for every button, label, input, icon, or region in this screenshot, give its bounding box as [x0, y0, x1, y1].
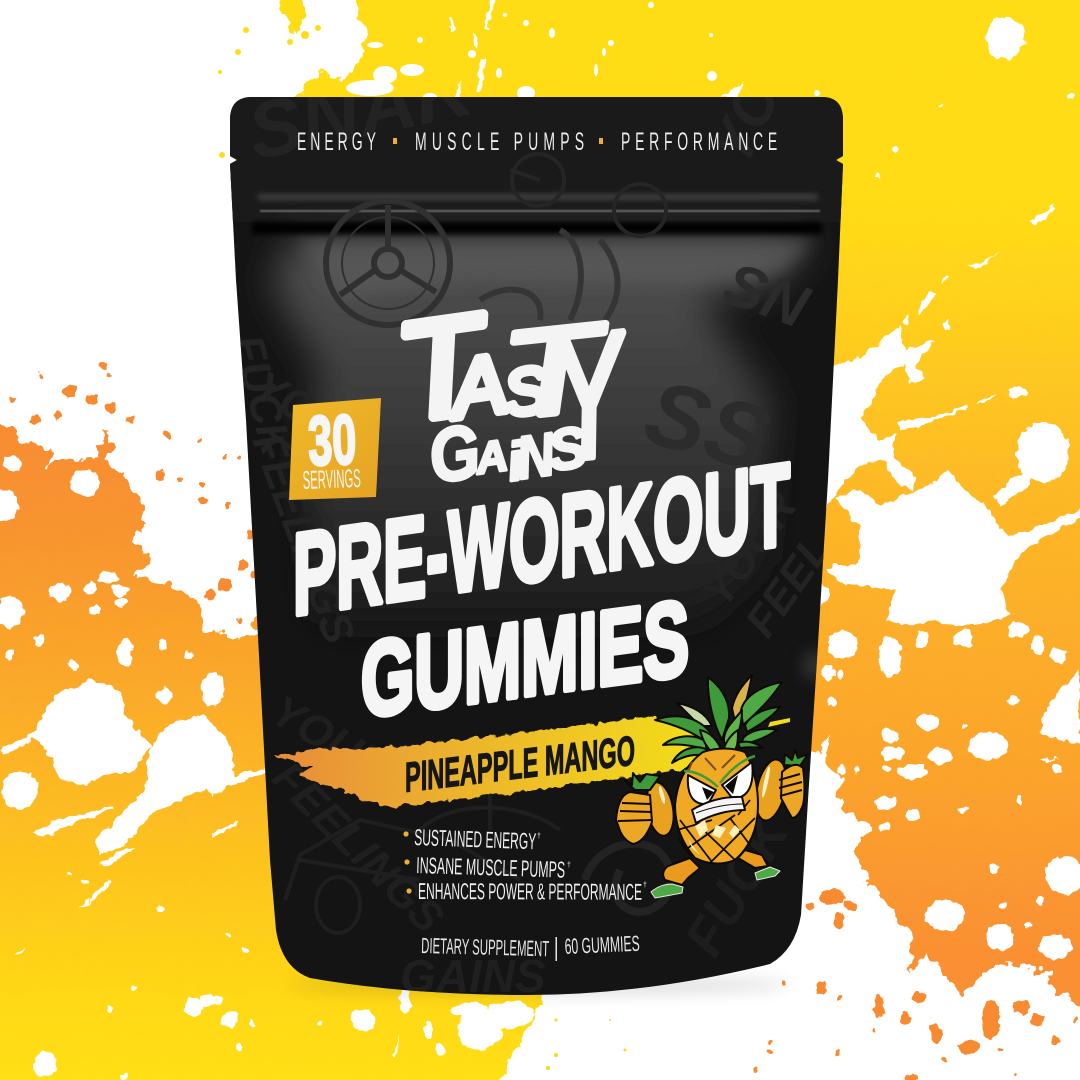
pouch doodle pattern	[240, 97, 824, 992]
loop doodle	[585, 844, 671, 912]
badge: 30 servings: SERVINGS	[302, 463, 361, 495]
doodle lettering: GAINS	[400, 950, 546, 1002]
pupils	[702, 775, 738, 800]
right leg	[738, 850, 768, 868]
bag shadow	[290, 975, 790, 995]
logo: Tasty Gains: S	[500, 353, 552, 430]
pineapple body	[675, 748, 758, 864]
flavour swoosh: PINEAPPLE MANGO	[405, 727, 635, 801]
left finger lines	[618, 803, 652, 821]
right mango leaf	[784, 750, 808, 766]
green brows	[684, 756, 755, 787]
angry right eye	[722, 762, 753, 799]
benefits list: †	[537, 833, 541, 840]
doodle lettering: SS	[635, 361, 780, 491]
left leg	[663, 858, 700, 885]
weight plate doodle	[326, 201, 450, 325]
logo: Tasty Gains	[388, 285, 640, 499]
logo: Tasty Gains: Y	[541, 294, 640, 497]
tagline: PERFORMANCE	[621, 129, 777, 156]
benefits list: SUSTAINED ENERGY	[414, 824, 537, 854]
background: right yellow to orange paint	[276, 0, 1080, 1003]
background: fine orange splatter left	[10, 361, 259, 623]
pouch body	[230, 97, 843, 995]
doodle lettering: YOUR	[693, 483, 806, 616]
right fist	[781, 765, 804, 818]
background: white and yellow flecks at top	[218, 0, 820, 158]
right mango	[751, 757, 791, 823]
background: white splats in right paint	[808, 17, 1080, 959]
left mango leaf	[625, 773, 660, 790]
barbell doodle	[510, 154, 666, 236]
logo: Tasty Gains: S	[544, 414, 591, 484]
rind highlights	[688, 820, 740, 855]
badge: 30 servings: 30	[307, 400, 357, 480]
doodle lettering: FEELINGS	[243, 427, 364, 650]
logo: Tasty Gains: N	[513, 420, 560, 492]
logo: Tasty Gains: T	[388, 285, 501, 451]
doodle lettering	[240, 97, 824, 992]
mascot: angry pineapple	[616, 675, 808, 898]
background: white splats in left paint	[0, 427, 534, 1080]
headline: gummies: GUMMIES	[361, 578, 689, 740]
benefits list: †	[643, 882, 647, 889]
logo: Tasty Gains: T	[496, 297, 617, 444]
net contents: 60 GUMMIES	[564, 931, 640, 959]
right finger lines	[779, 774, 802, 796]
flavour swoosh	[272, 717, 790, 807]
benefits list	[403, 824, 647, 905]
teeth line	[696, 804, 743, 813]
tagline	[297, 129, 777, 156]
benefits list: ENHANCES POWER & PERFORMANCE	[418, 878, 642, 905]
net contents: DIETARY SUPPLEMENT	[421, 933, 549, 961]
logo: Tasty Gains: i	[503, 431, 528, 493]
pouch	[230, 97, 843, 995]
doodle lettering: FUCK	[222, 330, 302, 464]
top rind shading	[688, 755, 735, 772]
background: orange flecks bottom right	[752, 888, 1078, 1080]
tagline: MUSCLE PUMPS	[415, 129, 584, 156]
doodle lettering: SNAK	[240, 41, 485, 177]
palm doodle	[419, 794, 561, 832]
doodle lettering: FUCK	[673, 803, 802, 966]
logo: Tasty Gains: A	[441, 338, 513, 437]
car doodle	[285, 820, 520, 933]
doodle lettering: FEELINGS	[263, 752, 453, 943]
left fruit highlight	[658, 786, 666, 804]
left fist	[616, 792, 652, 844]
logo: Tasty Gains: A	[472, 431, 511, 484]
rind cells	[677, 800, 755, 863]
angry left eye	[688, 775, 716, 804]
benefits list: INSANE MUSCLE PUMPS	[416, 852, 566, 883]
left mango	[643, 780, 677, 838]
doodle lettering: YOUR	[263, 686, 398, 792]
doodle lettering: YOUR	[245, 361, 380, 467]
background: yellow flecks under pouch	[546, 1018, 626, 1070]
benefits list: †	[567, 862, 571, 869]
doodle lettering: SN	[716, 249, 818, 341]
background: left orange to yellow paint	[0, 423, 545, 1080]
left shoe	[651, 884, 683, 898]
right fruit highlight	[761, 766, 771, 798]
doodle lettering: FEEL	[736, 526, 841, 646]
squat figure doodle	[480, 230, 618, 320]
right shoe	[755, 867, 780, 880]
gritted mouth	[692, 797, 745, 823]
badge: 30 servings	[289, 398, 381, 500]
logo: Tasty Gains: G	[423, 408, 485, 499]
pouch shading	[230, 97, 850, 679]
crown leaves	[655, 675, 782, 763]
tagline: ENERGY	[297, 129, 376, 156]
